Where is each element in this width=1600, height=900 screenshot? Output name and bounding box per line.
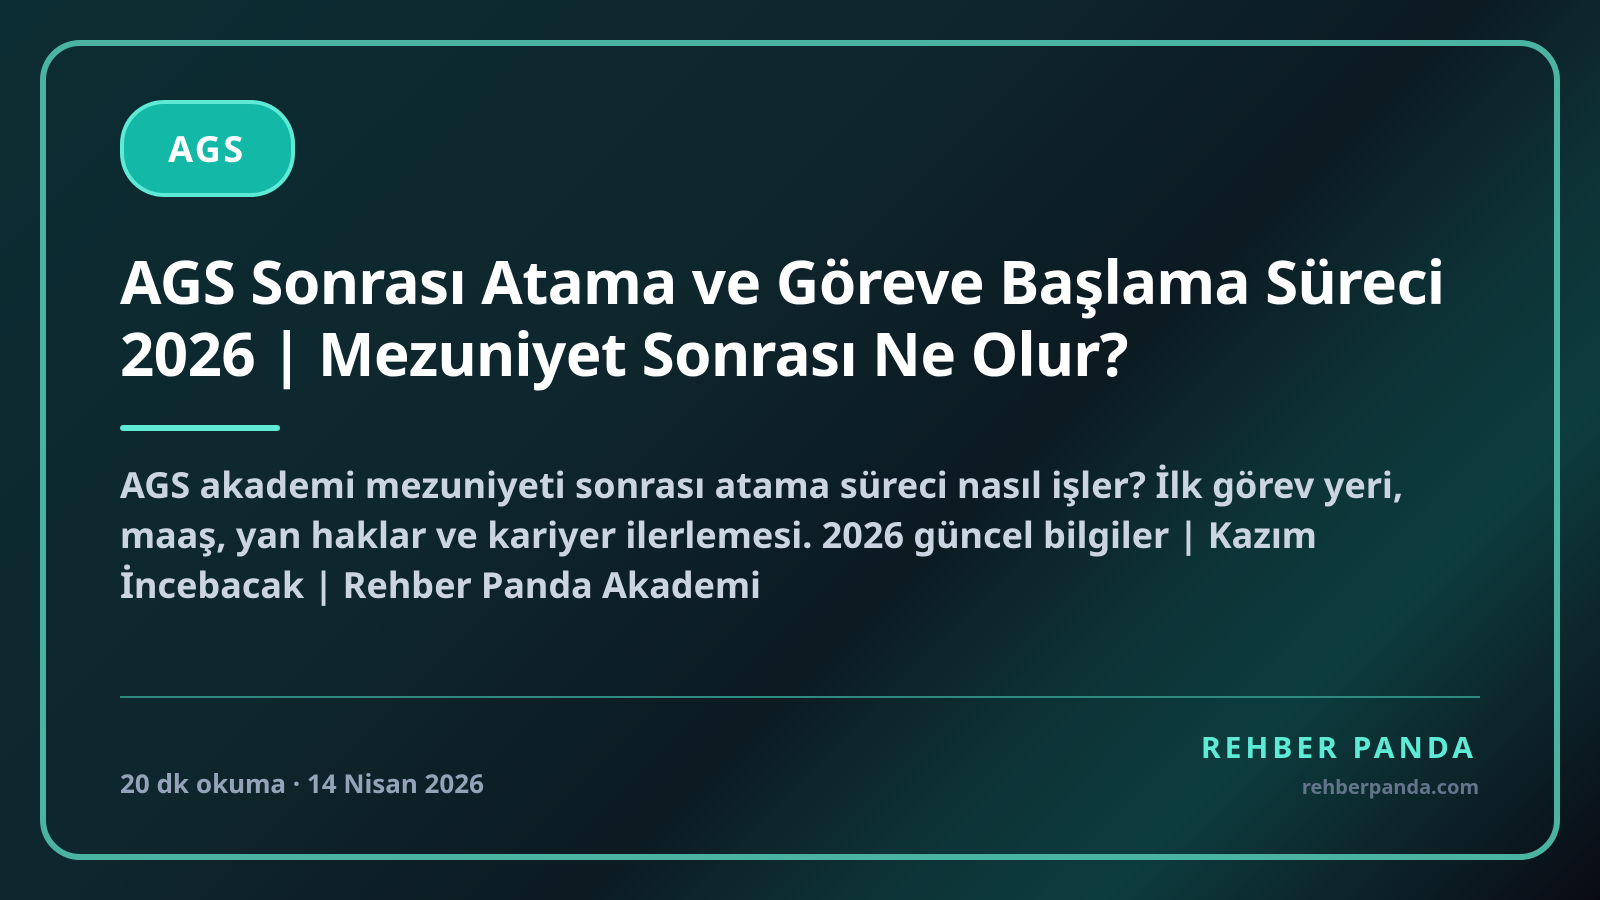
description: [120, 460, 1403, 609]
title: [120, 240, 1444, 394]
title: 2026 | Mezuniyet Sonrası Ne Olur?: [120, 312, 1128, 394]
reading time and date: 20 dk okuma · 14 Nisan 2026: [120, 765, 484, 801]
brand name: REHBER PANDA: [1201, 726, 1477, 767]
brand block: [1201, 726, 1479, 800]
badge: AGS: [120, 100, 295, 197]
accent bar: [120, 425, 280, 431]
badge: AGS: AGS: [168, 124, 246, 173]
description: İncebacak | Rehber Panda Akademi: [120, 560, 761, 609]
website: rehberpanda.com: [1302, 773, 1479, 800]
title: AGS Sonrası Atama ve Göreve Başlama Süreci: [120, 240, 1444, 322]
divider: [120, 696, 1480, 698]
description: AGS akademi mezuniyeti sonrası atama süreci nasıl işler? İlk görev yeri,: [120, 460, 1403, 509]
description: maaş, yan haklar ve kariyer ilerlemesi. 2026 güncel bilgiler | Kazım: [120, 510, 1317, 559]
